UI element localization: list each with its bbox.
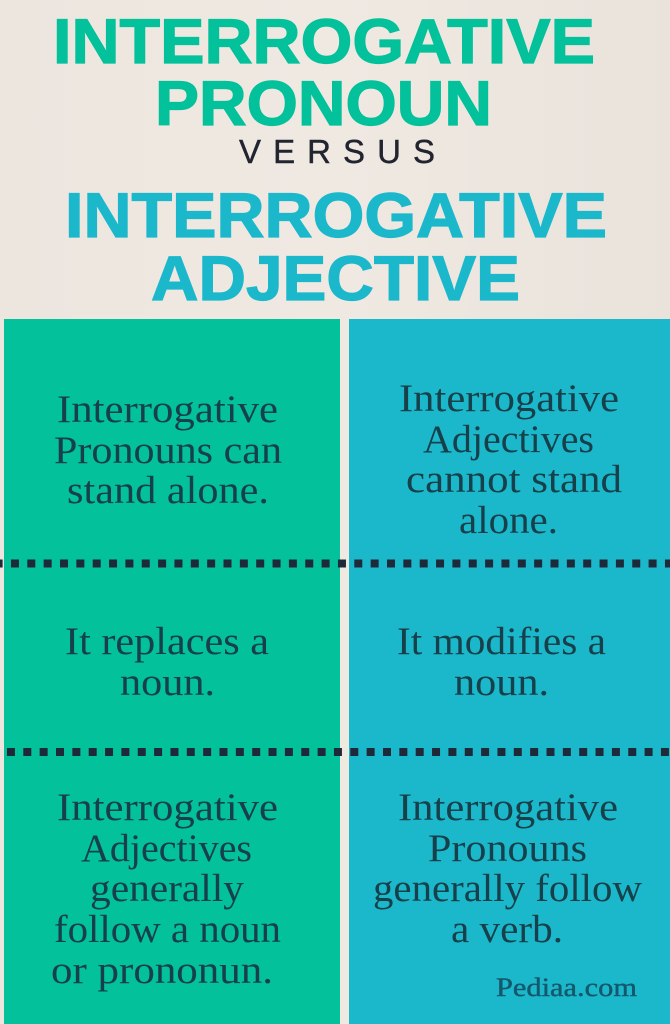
text: adjectives follow a noun: Adjectives [81,827,252,870]
text: adjectives cannot stand alone: Adjectives [423,418,594,461]
text: replaces a noun: It replaces a [65,620,269,663]
row 2 divider [0,748,670,756]
text: replaces a noun [65,620,269,704]
text: pronouns follow a verb: a verb. [451,908,563,951]
text: pronouns follow a verb [373,786,642,951]
heading: interrogative adjective: ADJECTIVE [151,244,520,314]
panel: interrogative adjective column [349,319,670,1024]
heading: interrogative adjective: INTERROGATIVE [65,181,607,251]
heading: interrogative pronoun [53,7,595,139]
text: pronouns follow a verb: generally follow [373,867,642,910]
text: adjectives follow a noun: generally [90,867,245,910]
text: replaces a noun: noun. [120,661,215,704]
text: pronouns follow a verb: Pronouns [428,827,587,870]
text: adjectives follow a noun: or prononun. [51,949,273,992]
text: pronouns stand alone: stand alone. [67,469,269,512]
heading: interrogative pronoun: INTERROGATIVE [53,7,595,77]
heading: interrogative pronoun: PRONOUN [155,69,492,139]
text: adjectives follow a noun: follow a noun [54,908,281,951]
row 1 divider [0,560,670,568]
text: adjectives follow a noun [51,786,281,992]
text: adjectives cannot stand alone [399,377,623,542]
text: adjectives cannot stand alone: Interrogative [399,377,619,420]
logo: Pediaa.com: Pediaa.com [496,973,637,1002]
panel: interrogative pronoun column [4,319,340,1024]
text: modifies a noun: It modifies a [397,620,606,663]
heading: interrogative adjective [65,181,607,314]
title [53,7,607,314]
text: pronouns stand alone [54,388,282,512]
heading: versus: VERSUS [239,133,435,170]
text: adjectives cannot stand alone: alone. [459,499,558,542]
text: modifies a noun: noun. [454,661,549,704]
text: modifies a noun [397,620,606,704]
text: adjectives cannot stand alone: cannot stand [406,458,623,501]
text: pronouns follow a verb: Interrogative [398,786,618,829]
text: pronouns stand alone: Interrogative [57,388,278,431]
text: adjectives follow a noun: Interrogative [57,786,278,829]
text: pronouns stand alone: Pronouns can [54,429,282,472]
